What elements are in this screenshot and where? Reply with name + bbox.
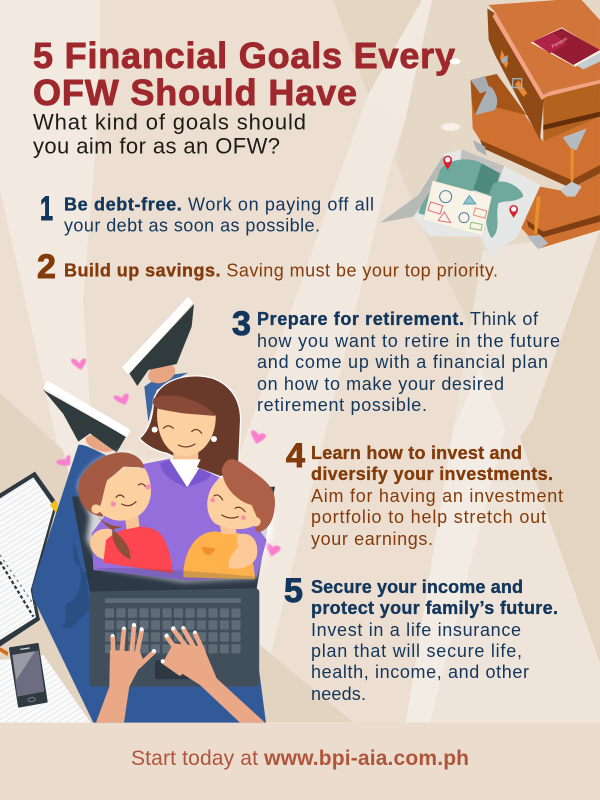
goal 3: and come up with a financial plan	[257, 352, 548, 372]
goal 5: plan that will secure life,	[311, 641, 522, 661]
goal 4: portfolio to help stretch out	[311, 507, 546, 527]
subtitle: What kind of goals should	[33, 110, 306, 134]
goal 4: Aim for having an investment	[311, 486, 563, 506]
goal 5: Secure your income and	[311, 577, 523, 597]
goal 5: 5	[284, 572, 303, 610]
paper under phone	[0, 647, 91, 723]
goal 5	[284, 572, 558, 704]
shoes	[43, 297, 194, 455]
illustration: person with laptop and family	[0, 297, 281, 723]
goal 1: Be debt-free. Work on paying off all	[64, 194, 374, 214]
open notebook	[0, 472, 58, 647]
goal 1: your debt as soon as possible.	[64, 216, 320, 236]
laptop screen with family photo	[72, 376, 275, 592]
goal 3: Prepare for retirement. Think of	[257, 309, 539, 329]
passport stamps page	[423, 181, 492, 236]
goal 3: how you want to retire in the future	[257, 331, 560, 351]
goal 5: health, income, and other	[311, 662, 529, 682]
screen lower fade	[95, 568, 255, 583]
goal 5: protect your family’s future.	[311, 598, 558, 618]
map	[380, 149, 541, 256]
phone	[10, 644, 47, 707]
jeans	[32, 373, 266, 723]
mother	[92, 376, 267, 581]
footer band	[0, 723, 600, 800]
hands	[96, 623, 265, 723]
title: 5 Financial Goals Every	[33, 35, 455, 76]
middle suitcase	[471, 74, 600, 197]
passport: Passport	[551, 36, 569, 49]
goal 3: 3	[232, 305, 251, 343]
laptop base and keyboard	[89, 588, 259, 687]
title	[33, 35, 455, 113]
footer band: Start today at www.bpi-aia.com.ph	[131, 747, 469, 770]
goal 4	[286, 437, 563, 549]
girl	[78, 452, 173, 573]
subtitle: you aim for as an OFW?	[33, 134, 280, 158]
subtitle	[33, 110, 306, 158]
laptop screen	[72, 487, 275, 592]
boy	[183, 459, 275, 579]
title: OFW Should Have	[33, 72, 357, 113]
goal 3: on how to make your desired	[257, 374, 504, 394]
goal 4: diversify your investments.	[311, 464, 553, 484]
illustration: suitcases, passport and map	[380, 0, 600, 256]
goal 2: Build up savings. Saving must be your top priority.	[64, 260, 498, 280]
goal 4: Learn how to invest and	[311, 443, 522, 463]
goal 5: Invest in a life insurance	[311, 620, 521, 640]
goal 1: 1	[40, 190, 53, 228]
goal 1	[40, 190, 374, 236]
goal 4: your earnings.	[311, 529, 433, 549]
goal 2: 2	[37, 248, 56, 286]
goal 5: needs.	[311, 684, 366, 704]
passport	[531, 27, 600, 69]
top suitcase	[487, 0, 600, 142]
clouds	[441, 58, 460, 131]
goal 3	[232, 305, 560, 415]
hearts	[56, 358, 281, 557]
goal 3: retirement possible.	[257, 395, 427, 415]
goal 4: 4	[286, 437, 305, 475]
goal 2	[37, 248, 498, 286]
bottom suitcase	[520, 173, 600, 249]
screen glow	[78, 452, 273, 582]
map pins	[443, 156, 518, 218]
